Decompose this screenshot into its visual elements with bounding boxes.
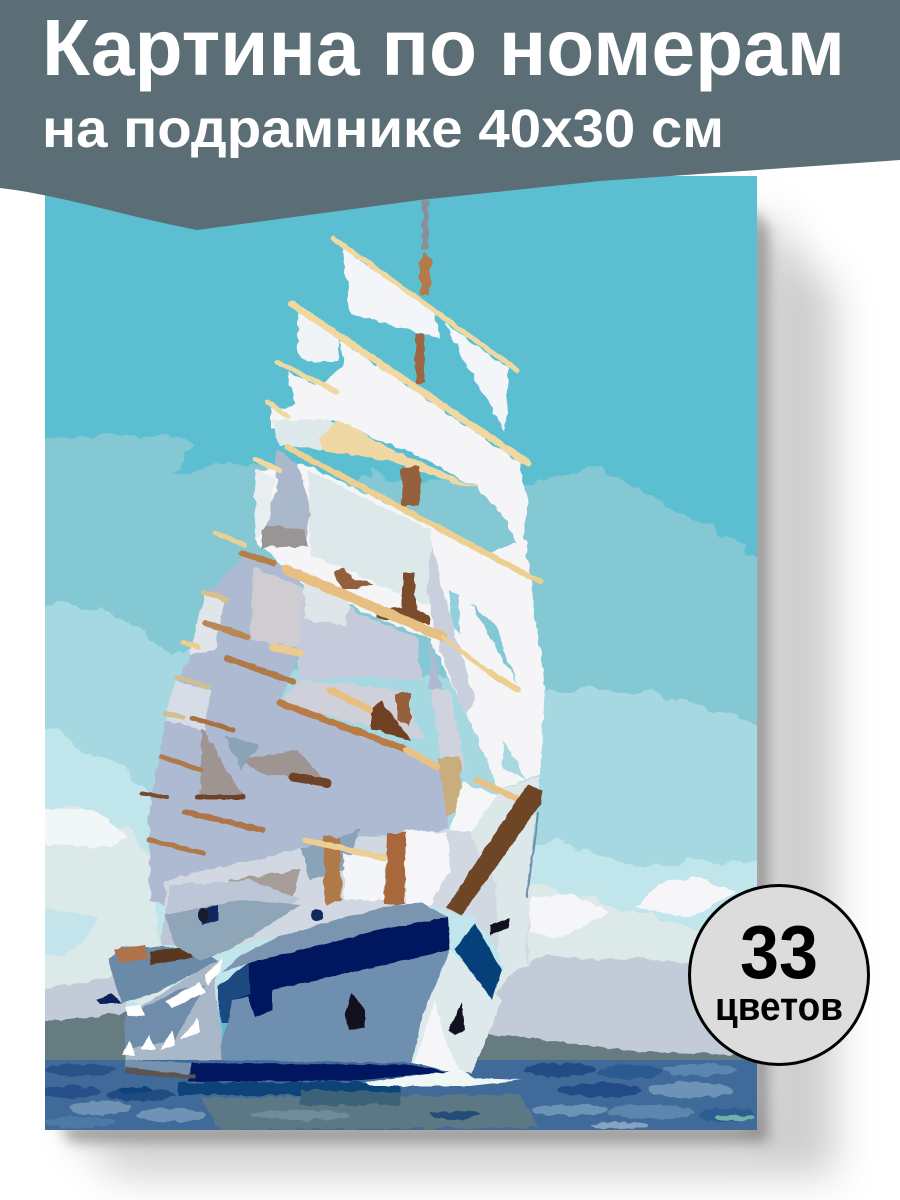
subtitle: на подрамнике 40х30 см <box>42 99 724 159</box>
white top sails <box>343 250 440 338</box>
lavender lower sails <box>148 555 448 920</box>
mid white sail with sky openings <box>255 463 545 790</box>
deck clutter <box>165 900 300 960</box>
badge: number of colours <box>690 886 868 1064</box>
bow <box>412 950 502 1073</box>
backing behind lower rigging <box>164 828 530 966</box>
right sail lower <box>438 757 463 817</box>
badge label: цветов <box>715 985 843 1029</box>
lower stern hull <box>125 960 222 1060</box>
hull <box>97 900 522 1086</box>
top mast <box>422 200 428 250</box>
sails and rigging <box>148 200 545 965</box>
shaded grey sail <box>263 448 310 543</box>
sea <box>40 1060 757 1132</box>
anchors <box>345 993 365 1030</box>
title: Картина по номерам <box>42 3 845 92</box>
header banner <box>0 0 900 230</box>
canvas shadow <box>60 205 835 1175</box>
navy band <box>218 917 450 1023</box>
distant mountains <box>45 954 746 1060</box>
upper hull band <box>222 903 448 973</box>
large white sail <box>270 340 527 550</box>
grey streak in right sail <box>426 545 475 715</box>
masts lower <box>323 837 342 905</box>
waterline <box>188 1063 448 1082</box>
hull side <box>220 950 450 1063</box>
painting: sailing ship <box>20 176 780 1132</box>
yards <box>142 238 540 897</box>
white portholes <box>122 1018 200 1056</box>
badge number: 33 <box>740 910 818 994</box>
clouds: background layers <box>20 432 780 1010</box>
stern superstructure <box>108 947 218 1003</box>
sky <box>45 176 757 1130</box>
brown-grey shaded areas <box>200 727 243 797</box>
bowsprit <box>446 785 543 915</box>
